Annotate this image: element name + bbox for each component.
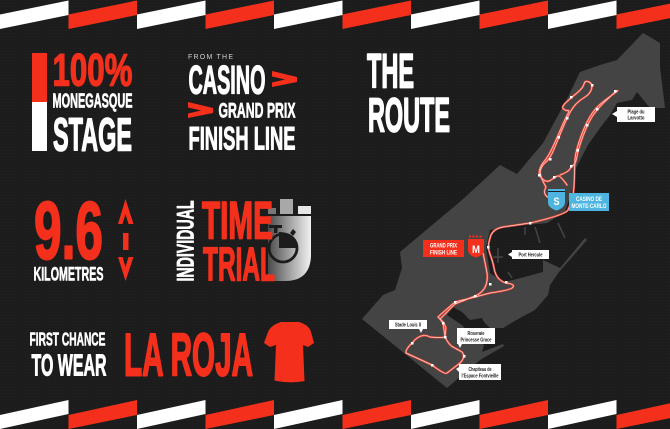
label: Casino de Monte-Carlo [569,193,609,211]
label: Plage du Larvotto [612,107,655,122]
label: Stade Louis II [389,320,427,333]
stat: casino to finish line [188,54,297,156]
To Wear label: TO WEAR [32,348,106,382]
label: Stade Louis II: Stade Louis II [395,322,421,328]
arrow: grand prix [188,102,213,118]
start shield: S: S [554,196,560,208]
top stripe band [0,0,670,29]
icon: red jersey [264,322,314,382]
label: Plage du Larvotto: Plage du [628,110,644,116]
finish shield: M [468,236,484,258]
label: Grand Prix Finish Line [423,240,464,257]
Individual label: INDIVIDUAL [172,200,200,282]
route map [362,33,665,388]
arrow: casino [272,71,297,87]
finish shield: M: M [472,244,480,256]
label: Chapiteau de l'Espace Fontvieille: l'Espace Fontvieille [462,374,499,380]
route kilometre markers [411,84,616,366]
label: Chapiteau de l'Espace Fontvieille: Chapiteau de [468,367,492,373]
label: Roseraie Princesse Grace: Princesse Grace [460,338,492,344]
icon: stopwatch on gradient badge [268,199,311,281]
stat: first chance to wear la roja: LA ROJA [124,322,253,388]
start shield: S [548,189,565,210]
stat: first chance to wear la roja [30,322,314,388]
Stage label: STAGE [53,108,132,160]
heading: the route [367,46,450,142]
Trial label: TRIAL [203,238,275,290]
bottom stripe band [0,400,670,429]
from the label: FROM THE [188,54,233,61]
label: Chapiteau de l'Espace Fontvieille [456,364,501,380]
text: ROUTE [368,90,450,142]
arrow: distance scale [118,199,134,281]
First Chance label: FIRST CHANCE [30,328,106,350]
Casino label: CASINO [188,58,266,102]
map: land mass of Monaco [362,33,665,388]
label: Port Hercule [508,250,549,259]
distance figure: 9.6 [34,186,103,276]
Time label: TIME [202,192,273,250]
Monegasque label: MONEGASQUE [52,90,132,112]
kilometres label: KILOMETRES [34,264,104,286]
label: Grand Prix Finish Line: GRAND PRIX [430,244,457,250]
100% figure: 100% [52,44,132,96]
Grand Prix label: GRAND PRIX [218,98,296,122]
route line [406,81,618,373]
red and white vertical bar [32,53,47,151]
label: Port Hercule: Port Hercule [518,252,543,258]
stat: 9.6 kilometres [34,186,134,286]
label: Casino de Monte-Carlo: CASINO DE [576,197,602,203]
label: Roseraie Princesse Grace: Roseraie [468,331,485,337]
label: Grand Prix Finish Line: FINISH LINE [430,250,457,256]
Finish Line label: FINISH LINE [188,120,296,156]
label: Roseraie Princesse Grace [457,328,495,348]
stat: individual time trial [172,192,311,290]
label: Casino de Monte-Carlo: MONTE-CARLO [572,204,607,210]
stat: 100% Monegasque stage [32,44,132,160]
map: Fontvieille harbour water [447,307,488,345]
label: Plage du Larvotto: Larvotto [628,116,644,122]
heading: the route: THE [367,46,414,98]
map: harbour piers [493,223,565,278]
